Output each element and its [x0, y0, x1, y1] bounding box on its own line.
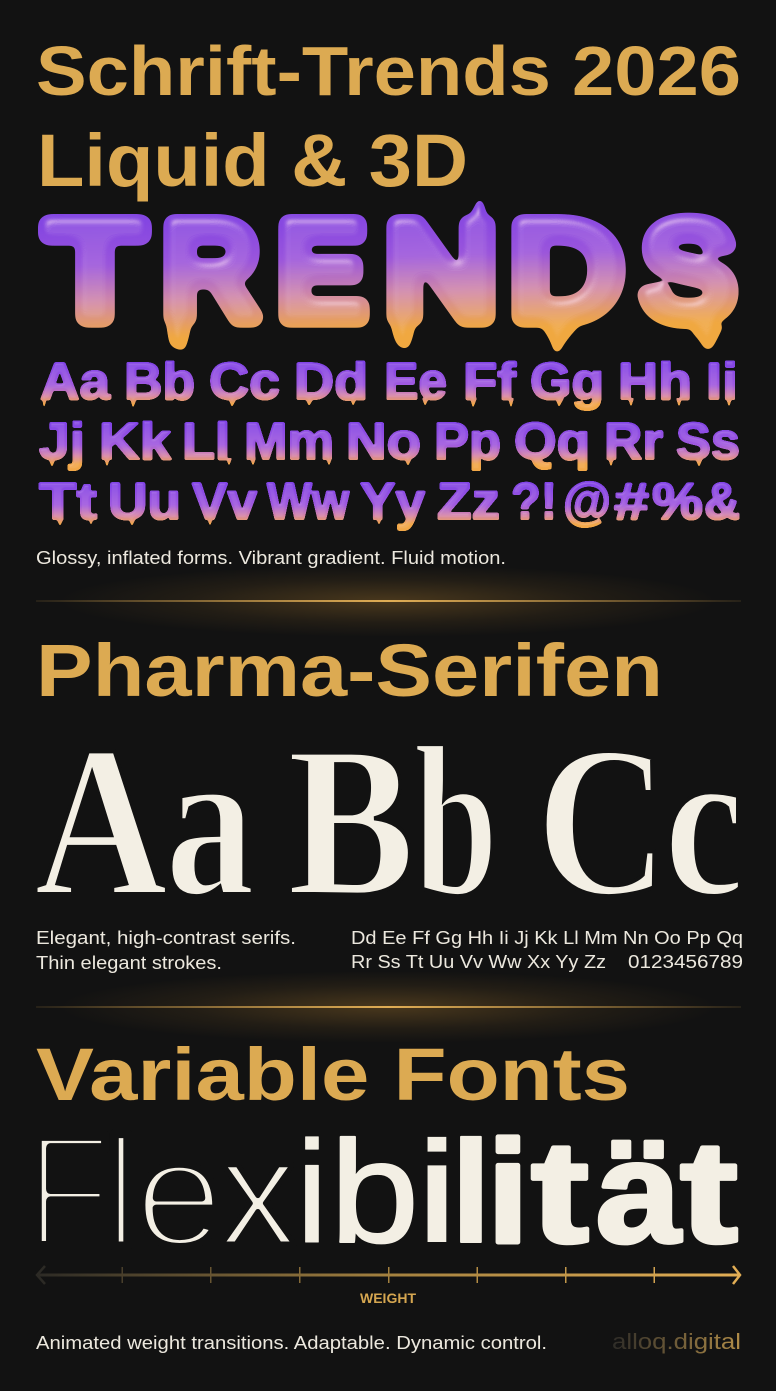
- serif specimen: A: [34, 702, 168, 941]
- liquid word: TRENDS: R: [163, 197, 259, 346]
- weight specimen: Flexibilität: l: [104, 1106, 138, 1279]
- row 3: [39, 473, 740, 531]
- row 1: Dd: [294, 353, 368, 411]
- row 1: Ee: [384, 353, 447, 411]
- row 3: %: [652, 473, 703, 531]
- section: pharma serifs: [34, 629, 744, 973]
- weight specimen: Flexibilität: t: [680, 1111, 738, 1273]
- row 2: Qq: [514, 413, 590, 471]
- row 2: [39, 413, 740, 471]
- row 2: Mm: [244, 413, 334, 471]
- liquid word: TRENDS: S: [642, 197, 734, 346]
- row 2: Pp: [434, 413, 501, 471]
- glyph set: Rr Ss Tt Uu Vv Ww Xx Yy Zz: [351, 952, 606, 972]
- weight specimen: Flexibilität: t: [531, 1111, 589, 1273]
- serif specimen: b: [414, 702, 498, 941]
- liquid word: TRENDS: T: [47, 197, 143, 346]
- weight specimen: Flexibilität: F: [26, 1101, 111, 1280]
- row 2: Jj: [39, 413, 85, 471]
- row 3: &: [704, 473, 740, 531]
- weight specimen: Flexibilität: i: [418, 1111, 456, 1273]
- row 2: No: [346, 413, 421, 471]
- row 1: Hh: [618, 353, 692, 411]
- glyph set: 0123456789: [628, 952, 743, 972]
- row 3: Zz: [437, 473, 500, 531]
- weight specimen: Flexibilität: b: [330, 1111, 419, 1273]
- caption: serifs: Elegant, high-contrast serifs.: [36, 928, 296, 948]
- row 2: Rr: [604, 413, 663, 471]
- alphabet specimen: [39, 353, 740, 531]
- serif specimen: C: [536, 702, 668, 941]
- row 1: Cc: [209, 353, 280, 411]
- row 3: @: [563, 473, 611, 531]
- row 3: Tt: [39, 473, 97, 531]
- serif specimen: a: [165, 702, 255, 941]
- weight specimen: Flexibilität: ä: [596, 1111, 681, 1273]
- serif specimen: c: [664, 702, 744, 941]
- weight axis arrow: [37, 1266, 740, 1284]
- heading: Pharma-Serifen: Pharma-Serifen: [36, 629, 663, 712]
- liquid word: TRENDS: N: [386, 197, 496, 346]
- serif specimen: [34, 702, 744, 941]
- row 1: Aa: [40, 353, 111, 411]
- weight specimen: Flexibilität: [26, 1101, 738, 1280]
- divider glow 2: [36, 971, 741, 1043]
- section: liquid and 3D: [36, 32, 741, 568]
- liquid word: TRENDS: [47, 197, 734, 352]
- liquid word: TRENDS: D: [511, 197, 621, 346]
- row 1: Ff: [463, 353, 517, 411]
- row 2: Kk: [99, 413, 171, 471]
- weight specimen: Flexibilität: l: [451, 1111, 491, 1273]
- watermark: alloq.digital: [612, 1329, 741, 1354]
- weight specimen: Flexibilität: i: [488, 1111, 528, 1273]
- row 3: ?!: [511, 473, 557, 531]
- caption: liquid: Glossy, inflated forms. Vibrant gradient. Fluid motion.: [36, 548, 506, 568]
- heading: Liquid & 3D: Liquid & 3D: [37, 119, 468, 202]
- row 1: Bb: [124, 353, 195, 411]
- row 3: Vv: [192, 473, 257, 531]
- weight specimen: Flexibilität: i: [296, 1111, 328, 1273]
- row 3: Yy: [360, 473, 425, 531]
- caption: serifs: [36, 928, 296, 973]
- divider glow 1: [36, 565, 741, 637]
- title: Schrift-Trends 2026: [36, 32, 741, 110]
- caption: variable: Animated weight transitions. Adaptable. Dynamic control.: [36, 1333, 547, 1353]
- weight specimen: Flexibilität: e: [135, 1109, 223, 1277]
- caption: serifs: Thin elegant strokes.: [36, 953, 222, 973]
- row 1: Ii: [706, 353, 738, 411]
- row 3: Ww: [267, 473, 350, 531]
- serif specimen: B: [287, 702, 415, 941]
- row 2: Ll: [182, 413, 230, 471]
- section: variable fonts: [26, 1033, 741, 1354]
- row 2: Ss: [676, 413, 740, 471]
- liquid word: TRENDS: E: [278, 197, 365, 346]
- heading: Variable Fonts: Variable Fonts: [36, 1033, 630, 1116]
- axis label: WEIGHT: [360, 1290, 416, 1306]
- row 3: #: [614, 473, 649, 531]
- glyph set: Dd Ee Ff Gg Hh Ii Jj Kk Ll Mm Nn Oo Pp Qq: [351, 928, 743, 948]
- row 1: Gg: [530, 353, 604, 411]
- row 3: Uu: [108, 473, 181, 531]
- weight specimen: Flexibilität: x: [220, 1108, 296, 1276]
- glyph set: [351, 928, 743, 972]
- row 1: [40, 353, 738, 411]
